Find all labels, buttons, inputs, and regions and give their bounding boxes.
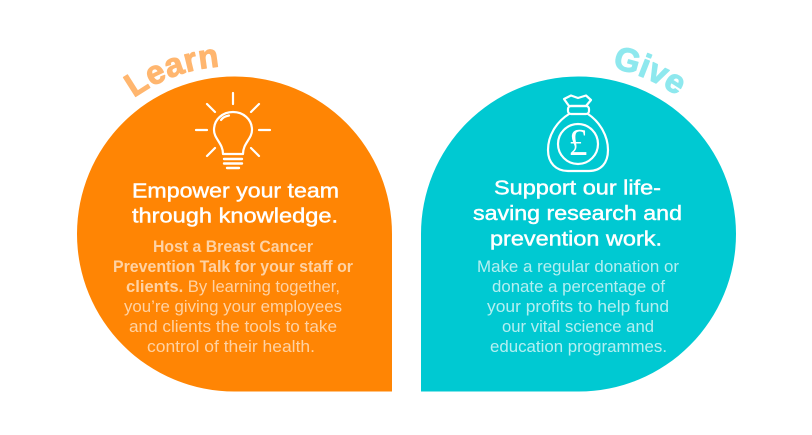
icon: money bag: £ (568, 122, 588, 164)
label: Learn: Learn (122, 49, 218, 98)
body text: learn: Prevention Talk for your staff or (113, 258, 354, 276)
panel: learn (77, 49, 392, 392)
body text: learn: clients. By learning together, (126, 278, 340, 296)
heading: empower your team (132, 180, 339, 228)
heading: support our research (473, 176, 682, 250)
body text: give: donate a percentage of (492, 278, 665, 296)
body text: learn: and clients the tools to take (129, 318, 337, 336)
label: Give: Give (615, 48, 684, 94)
body text: learn (113, 238, 354, 356)
body text: give (477, 258, 680, 356)
body text: give: Make a regular donation or (477, 258, 680, 276)
body text: learn: you’re giving your employees (124, 298, 342, 316)
body text: learn: Host a Breast Cancer (153, 238, 314, 256)
body text: learn: control of their health. (147, 338, 315, 356)
icon: light bulb (196, 93, 270, 168)
panel: give (421, 48, 736, 392)
heading: support our research: prevention work. (490, 228, 662, 250)
heading: empower your team: through knowledge. (132, 204, 338, 228)
body text: give: your profits to help fund (487, 298, 669, 316)
teal teardrop shape (421, 76, 736, 392)
heading: support our research: saving research and (473, 202, 682, 225)
body text: give: our vital science and (502, 318, 654, 336)
body text: give: education programmes. (490, 338, 667, 356)
heading: empower your team: Empower your team (132, 180, 339, 202)
icon: money bag (548, 96, 608, 171)
heading: support our research: Support our life- (494, 176, 661, 200)
orange teardrop shape (77, 76, 392, 392)
